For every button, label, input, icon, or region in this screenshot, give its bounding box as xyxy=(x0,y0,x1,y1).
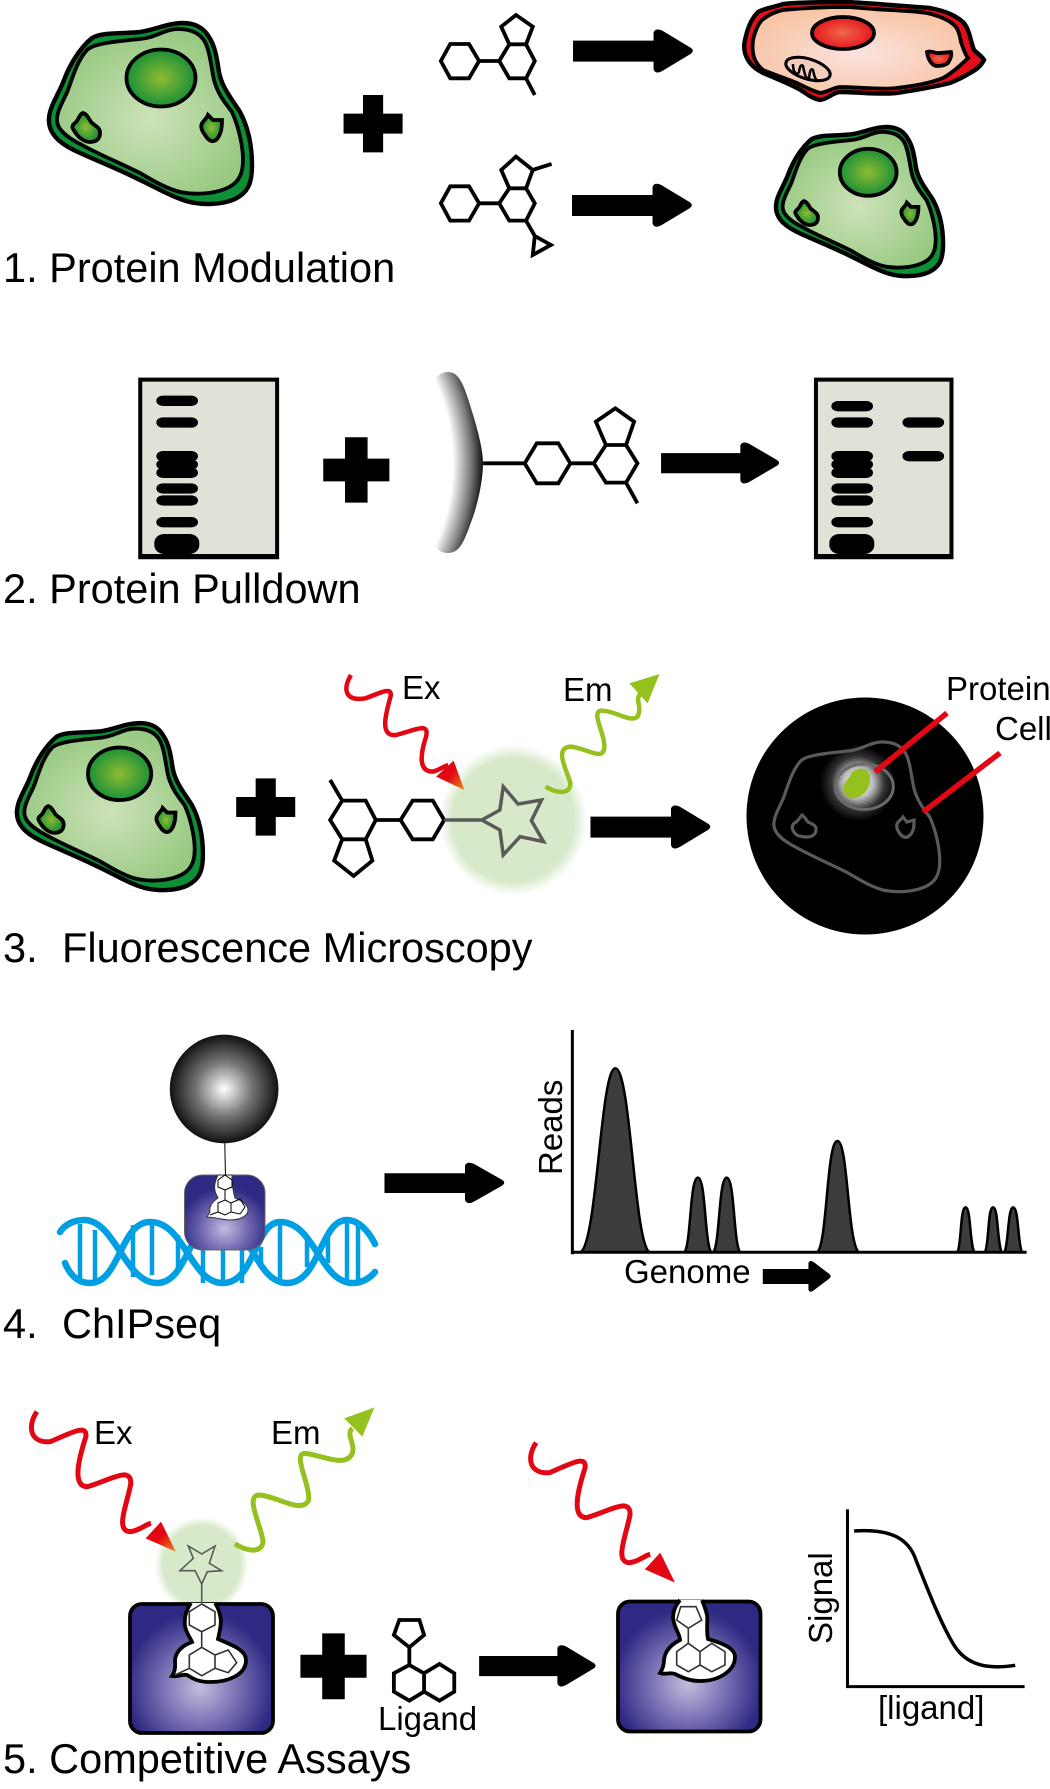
heading: protein pulldown: 2. Protein Pulldown xyxy=(3,565,361,612)
icon: fluorescence halo xyxy=(155,1517,249,1613)
icon: protein with bound ligand xyxy=(618,1600,760,1732)
heading: ChIPseq: 4. xyxy=(3,1300,38,1347)
chart: signal versus ligand concentration xyxy=(846,1509,1025,1688)
molecule: competing ligand xyxy=(394,1620,454,1701)
arrow: red excitation wave, no emission xyxy=(531,1443,675,1583)
panel: protein pulldown xyxy=(3,372,953,612)
heading: protein modulation: 1. Protein Modulation xyxy=(3,244,395,291)
ChIPseq scene xyxy=(170,1030,1027,1292)
molecule: immobilised compound xyxy=(483,408,637,503)
gel: pulldown result xyxy=(815,380,953,559)
arrow: red excitation wave xyxy=(31,1412,176,1552)
arrow: green emission wave xyxy=(546,674,660,792)
callout line: protein xyxy=(875,713,947,772)
label: Reads axis: Reads xyxy=(532,1080,569,1175)
icon: protein with bound probe xyxy=(130,1546,273,1733)
arrow: to microscope image xyxy=(590,805,710,848)
icon: affected red cell xyxy=(744,2,984,100)
icon: microscope field of view xyxy=(746,698,984,934)
label: Em: Em xyxy=(271,1414,320,1451)
label: Em: Em xyxy=(563,671,612,708)
panel: protein modulation xyxy=(3,2,984,291)
panel: fluorescence microscopy xyxy=(3,669,1050,971)
arrow: to displaced probe xyxy=(479,1645,596,1687)
molecule: fluorescent probe xyxy=(330,780,544,876)
icon: plus sign xyxy=(323,437,389,503)
molecule: active compound xyxy=(441,15,535,95)
icon: plus sign xyxy=(300,1633,367,1699)
arrow: genome direction xyxy=(763,1261,831,1292)
heading: fluorescence microscopy: Fluorescence Microscopy xyxy=(62,924,533,971)
heading: ChIPseq: ChIPseq xyxy=(62,1300,221,1347)
pulldown scene xyxy=(139,380,953,559)
icon: plus sign xyxy=(344,95,403,152)
arrow: green emission wave xyxy=(235,1407,374,1550)
arrow: red excitation wave xyxy=(346,675,464,790)
heading: fluorescence microscopy: 3. xyxy=(3,924,38,971)
microscopy scene xyxy=(236,674,710,895)
label: Protein: Protein xyxy=(946,670,1050,707)
panel: ChIPseq xyxy=(3,1030,1027,1347)
icon: magnetic bead xyxy=(170,1035,278,1143)
arrow: to affected cell xyxy=(573,29,693,72)
label: Ex: Ex xyxy=(94,1414,133,1451)
icon: bead surface xyxy=(433,372,483,553)
arrow: to reads plot xyxy=(384,1163,504,1203)
molecule: inactive compound xyxy=(441,157,552,255)
icon: starting green cell xyxy=(49,23,252,204)
gel: input lysate xyxy=(139,380,278,559)
label: Genome axis: Genome xyxy=(624,1253,751,1290)
icon: DNA-bound protein xyxy=(184,1175,265,1250)
competitive assay scene xyxy=(31,1407,1025,1701)
icon: DNA helix xyxy=(60,1220,375,1283)
heading: competitive assays: 5. Competitive Assays xyxy=(3,1735,411,1782)
icon: unaffected green cell xyxy=(776,127,943,276)
icon: fluorescence halo xyxy=(440,745,587,895)
compounds and arrows xyxy=(344,15,693,255)
label: Ex: Ex xyxy=(402,669,441,706)
icon: plus sign xyxy=(236,778,295,836)
arrow: to unaffected cell xyxy=(572,184,692,227)
icon: linker xyxy=(224,1143,226,1175)
icon: green cell xyxy=(17,723,203,890)
label: Signal axis: Signal xyxy=(802,1552,839,1644)
label: ligand axis: [ligand] xyxy=(878,1689,984,1726)
panel: competitive assays xyxy=(3,1407,1025,1782)
arrow: to pulldown result xyxy=(661,442,779,484)
chart: reads across the genome xyxy=(572,1030,1027,1254)
label: Ligand: Ligand xyxy=(378,1700,477,1737)
callout line: cell xyxy=(923,753,1000,812)
